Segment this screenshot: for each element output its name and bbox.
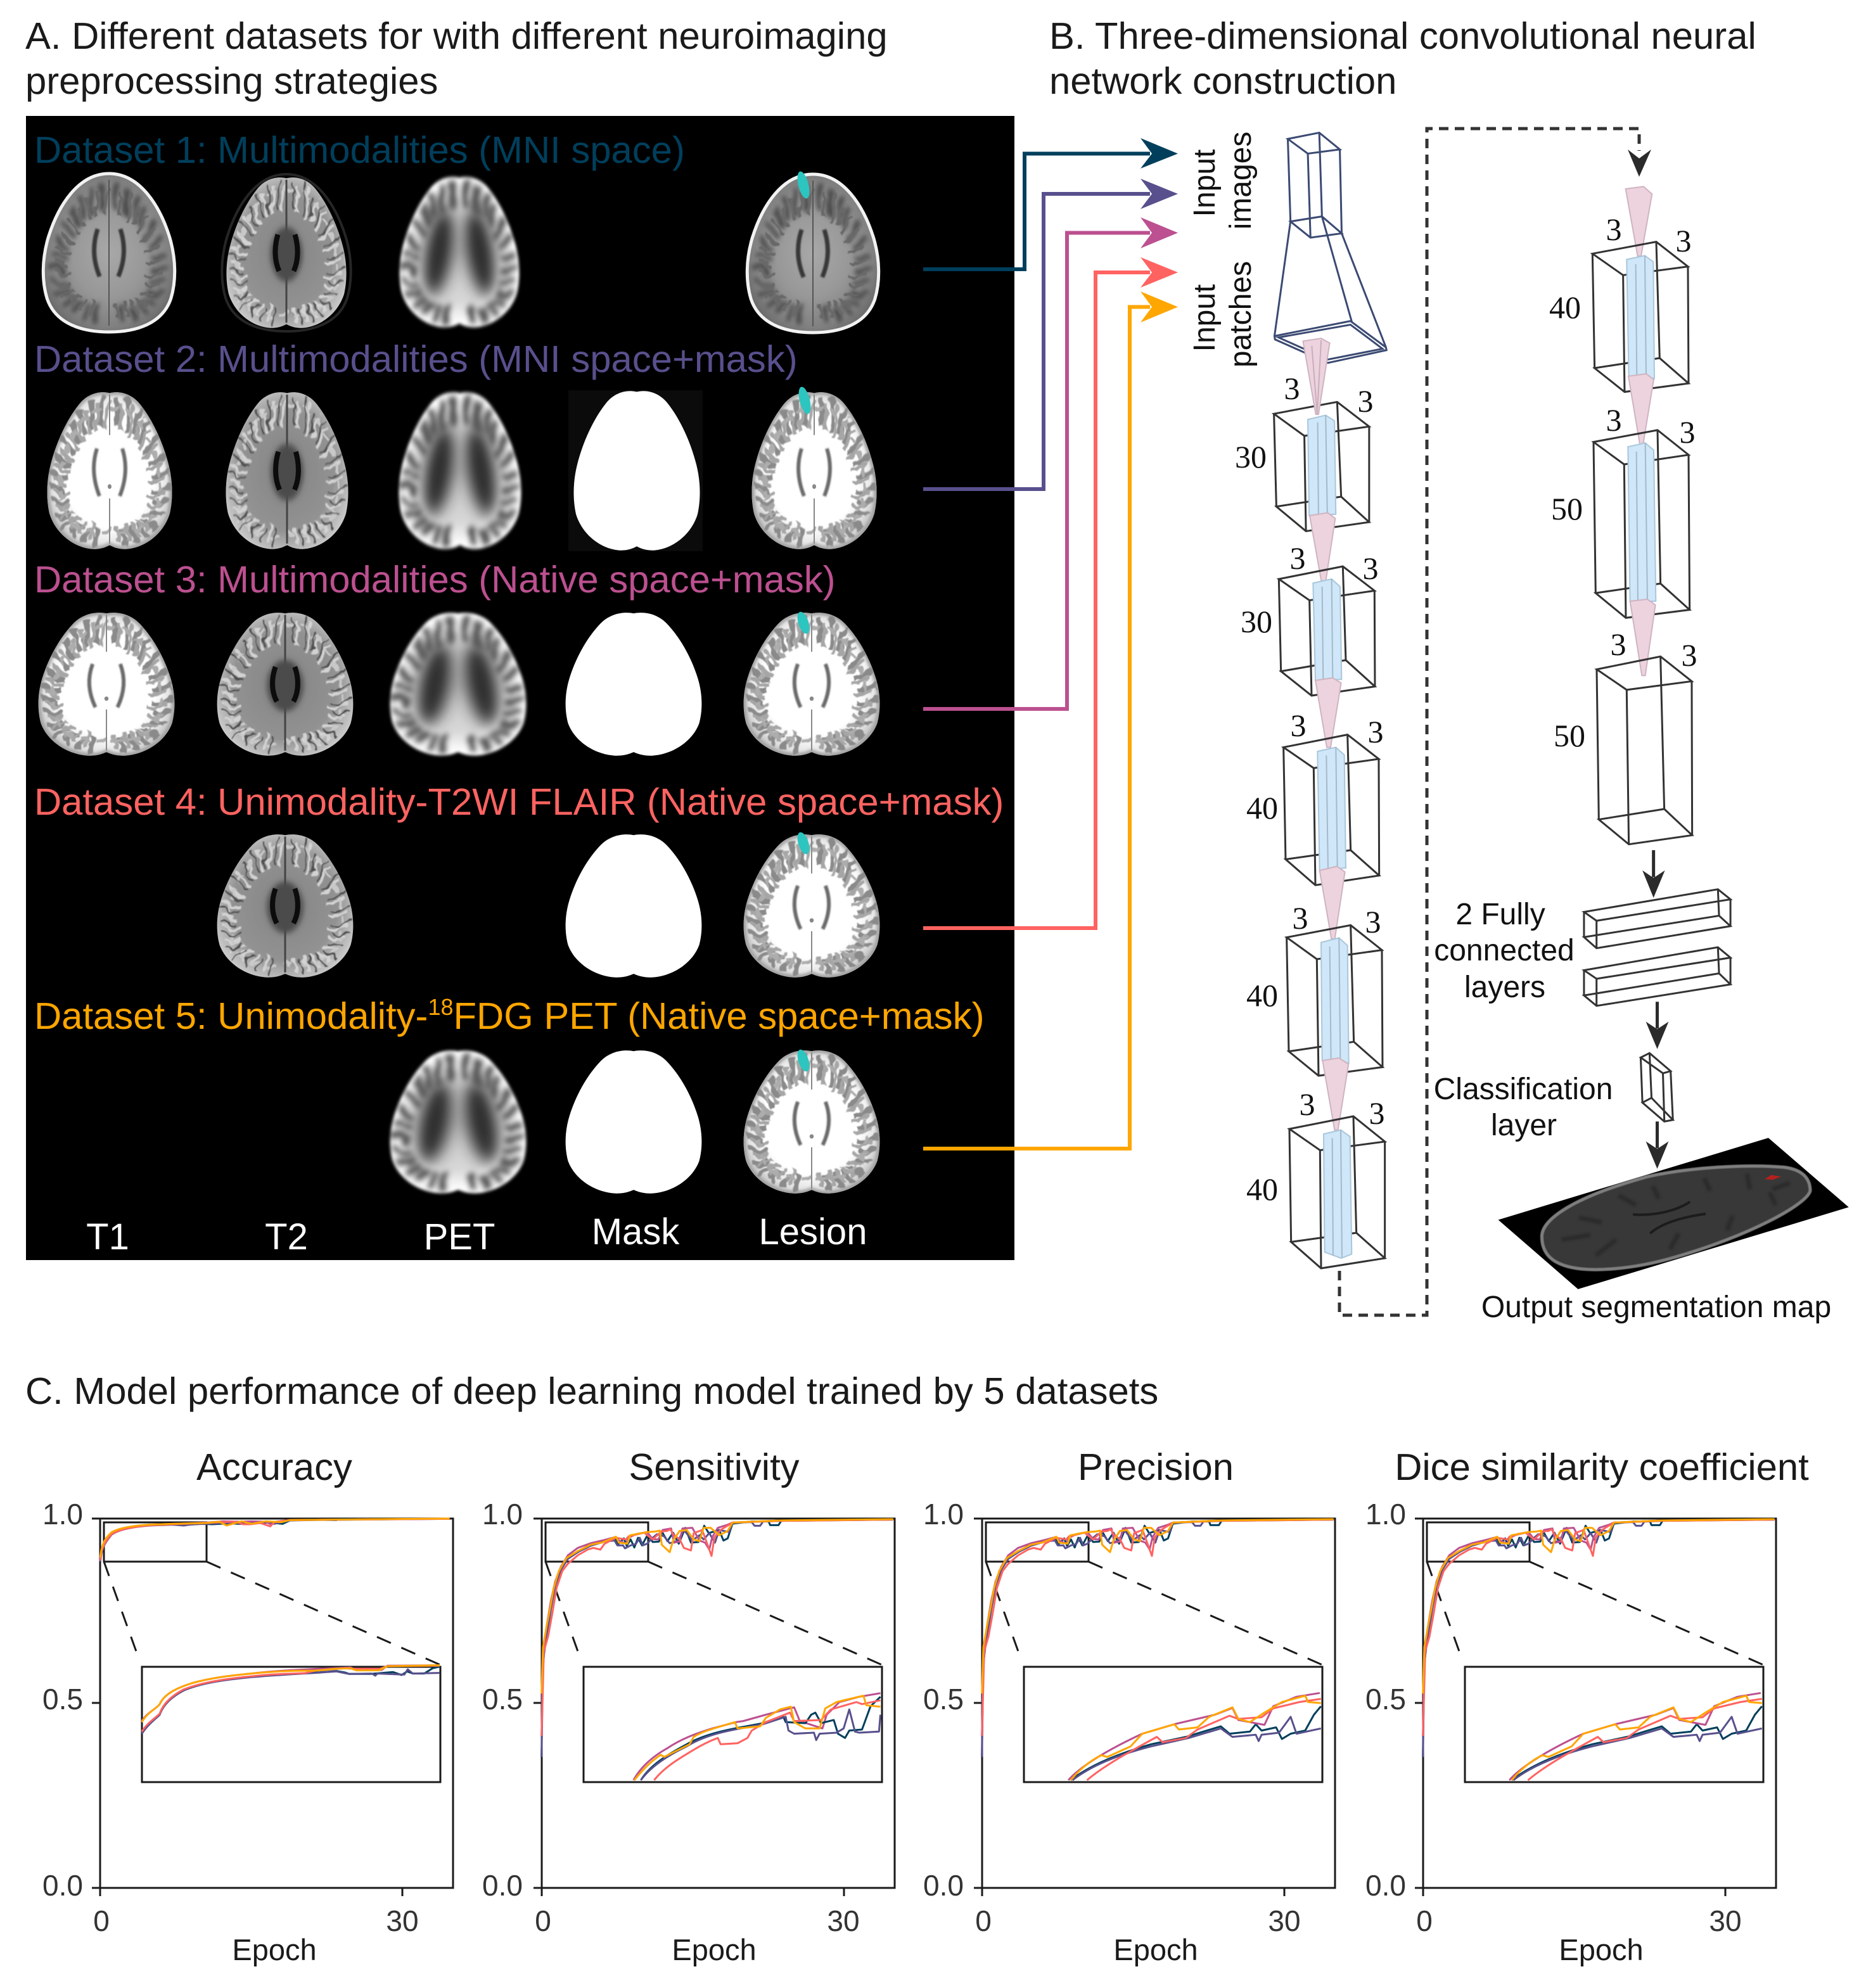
layer size labels: 3: [1369, 1095, 1385, 1131]
label: fully connected layers: connected: [1434, 934, 1575, 967]
label: classification layer: layer: [1491, 1109, 1557, 1142]
label: Input images: [1188, 132, 1258, 229]
x axis title: Epoch: [1559, 1933, 1644, 1966]
chart axes, zoom box and inset frame: [974, 1519, 1335, 1896]
row 5 brain: PET: [390, 1050, 526, 1194]
chart: accuracy: [42, 1446, 453, 1966]
x axis tick labels: [535, 1904, 860, 1937]
y axis tick labels: 0.0: [1365, 1869, 1406, 1902]
chart axes, zoom box and inset frame: [534, 1519, 895, 1896]
column label T1: T1: [86, 1216, 129, 1258]
layer size labels: 3: [1362, 551, 1379, 586]
y axis tick labels: 0.0: [923, 1869, 964, 1902]
layer size labels: 3: [1365, 904, 1381, 940]
layer size labels: 3: [1675, 223, 1692, 258]
x axis tick labels: [1416, 1904, 1742, 1937]
cone layer 2 to 3: [1315, 678, 1341, 748]
y axis tick labels: 0.5: [1365, 1683, 1406, 1716]
label: fully connected layers: layers: [1464, 971, 1545, 1004]
input image box and funnel: [1274, 132, 1386, 363]
arrow head: into right column: [1628, 150, 1651, 177]
network: input funnel and first conv layer: [1274, 132, 1386, 582]
label: classification layer: Classification: [1434, 1073, 1613, 1106]
chart axes, zoom box and inset frame: [1415, 1519, 1776, 1896]
row 3 brain: PET: [390, 613, 526, 756]
row 1 brain: PET: [399, 177, 520, 328]
layer 4 cube: [1287, 925, 1383, 1076]
heading: panel B: network construction: [1049, 60, 1396, 102]
x axis tick labels: [975, 1904, 1301, 1937]
column label Mask: Mask: [592, 1211, 680, 1252]
arrow: dataset 4 to input: [923, 257, 1178, 928]
layer 6 column: [1626, 255, 1654, 379]
x axis tick labels: 30: [1709, 1904, 1742, 1937]
label: Input patches: Input: [1188, 284, 1222, 352]
y axis tick labels: 1.0: [42, 1498, 83, 1531]
row 2 brain mask: [568, 390, 703, 551]
y axis tick labels: 0.5: [923, 1683, 964, 1716]
network: right column layers: [1592, 186, 1692, 844]
layer 6 cube: [1592, 242, 1689, 392]
cone layer 7 to 8: [1630, 599, 1656, 675]
row 2 brain: T2: [225, 392, 349, 549]
lesion marker row 5: [795, 1048, 812, 1073]
arrow: dataset 2 to input: [923, 179, 1178, 489]
dataset 3 label: Dataset 3: Multimodalities (Native space+mask): [34, 558, 836, 601]
dataset 5 label: FDG PET (Native space+mask): [454, 995, 984, 1037]
x axis tick labels: [93, 1904, 419, 1937]
layer 2 column: [1313, 579, 1341, 680]
cone into layer 6: [1626, 186, 1652, 256]
arrow: dataset 5 to input: [923, 291, 1178, 1149]
row 3 brain: T1: [39, 613, 174, 756]
arrow: dataset 1 to input: [923, 138, 1178, 269]
layer size labels: 3: [1293, 900, 1308, 936]
x axis title: Epoch: [1113, 1933, 1198, 1966]
y axis tick labels: 0.5: [42, 1683, 83, 1716]
arrow: dataset 3 to input: [923, 217, 1178, 709]
layer size labels: 3: [1679, 414, 1696, 450]
column label Lesion: Lesion: [759, 1211, 867, 1252]
network: output section: [1499, 850, 1849, 1289]
label: output segmentation map: Output segmentation map: [1481, 1290, 1831, 1324]
curves: inset: [1509, 1693, 1762, 1780]
row 4 brain: lesion overlay: [744, 834, 879, 978]
row 2 brain: PET: [399, 392, 521, 549]
label: Input patches: [1188, 261, 1258, 367]
dataset 1 label: Dataset 1: Multimodalities (MNI space): [34, 129, 685, 171]
chart: dice similarity coefficient: [1365, 1446, 1809, 1966]
label: Input images: Input: [1188, 150, 1222, 217]
row 3 brain mask: [566, 613, 701, 756]
chart title: Sensitivity: [629, 1446, 800, 1488]
chart: precision: [923, 1446, 1335, 1966]
dashed connector between network columns: [1339, 129, 1639, 1315]
y axis tick labels: 1.0: [482, 1498, 523, 1531]
panel A: datasets: [26, 116, 1014, 1260]
curves: main: [982, 1519, 1334, 1757]
chart title: Accuracy: [196, 1446, 352, 1488]
row 2 brain: T1: [47, 392, 172, 549]
row 1 brain: T1: [43, 174, 175, 332]
y axis tick labels: 1.0: [1365, 1498, 1406, 1531]
layer size labels: 3: [1682, 637, 1697, 673]
row 4 brain mask: [566, 834, 701, 978]
curves: inset: [1068, 1693, 1321, 1780]
layer 1 cube: [1274, 402, 1369, 531]
layer 4 column: [1321, 938, 1349, 1063]
layer size labels: 30: [1241, 604, 1272, 639]
layer 7 cube: [1594, 430, 1690, 618]
cone layer 4 to 5: [1322, 1058, 1348, 1130]
cone layer 3 to 4: [1320, 867, 1345, 939]
kernel cone into layer 1: [1303, 338, 1330, 414]
layer 7 column: [1628, 443, 1656, 601]
arrow to output map: [1646, 1121, 1668, 1169]
chart: sensitivity: [482, 1446, 895, 1966]
heading: panel A: preprocessing strategies: [25, 60, 438, 102]
dataset 5 label: 18: [428, 994, 454, 1020]
row 5 brain: lesion overlay: [744, 1050, 879, 1194]
label: fully connected layers: [1434, 898, 1575, 1004]
layer size labels: 3: [1606, 212, 1622, 247]
y axis tick labels: [1365, 1498, 1406, 1902]
chart axes, zoom box and inset frame: [92, 1519, 453, 1896]
column label T2: T2: [265, 1216, 308, 1258]
x axis tick labels: 0: [975, 1904, 992, 1937]
y axis tick labels: 0.0: [482, 1869, 523, 1902]
x axis tick labels: 0: [93, 1904, 110, 1937]
layer size labels: 3: [1290, 540, 1305, 576]
fully connected layer 2: [1584, 947, 1730, 1006]
lesion marker row 4: [795, 831, 812, 856]
layer size labels: 40: [1549, 290, 1581, 325]
row 4 brain: T2: [216, 834, 354, 978]
row 3 brain: T2: [216, 613, 354, 756]
curves: main and inset: [100, 1519, 450, 1734]
dataset 5 label: Dataset 5: Unimodality-: [34, 995, 428, 1037]
label: fully connected layers: 2 Fully: [1455, 898, 1545, 931]
row 3 brain: lesion overlay: [744, 613, 879, 756]
dataset 4 label: Dataset 4: Unimodality-T2WI FLAIR (Native space+mask): [34, 781, 1004, 823]
y axis tick labels: [923, 1498, 964, 1902]
layer 1 feature column: [1308, 415, 1336, 516]
label: classification layer: [1434, 1073, 1613, 1142]
heading: panel C: C. Model performance of deep learning model trained by 5 datasets: [25, 1370, 1158, 1412]
layer size labels: 3: [1290, 708, 1307, 743]
label: Input patches: patches: [1224, 261, 1258, 367]
y axis tick labels: 0.5: [482, 1683, 523, 1716]
arrow to fully connected layers: [1642, 850, 1665, 898]
layer 3 column: [1317, 748, 1346, 870]
lesion marker row 3: [795, 610, 812, 635]
curves: main: [1423, 1519, 1775, 1757]
layer 2 cube: [1279, 566, 1375, 696]
dataset 2 label: Dataset 2: Multimodalities (MNI space+mask): [34, 338, 798, 380]
classification layer box: [1640, 1053, 1673, 1121]
x axis title: Epoch: [232, 1933, 317, 1966]
chart title: Dice similarity coefficient: [1395, 1446, 1809, 1488]
layer size labels: 3: [1611, 627, 1626, 662]
y axis tick labels: 0.0: [42, 1869, 83, 1902]
x axis tick labels: 30: [827, 1904, 860, 1937]
layer size labels: 3: [1299, 1086, 1315, 1122]
layer size labels: 40: [1246, 1171, 1278, 1207]
lesion marker row 1: [795, 170, 812, 200]
layer size labels: 3: [1357, 383, 1374, 419]
layer size labels: 50: [1554, 718, 1585, 753]
network: left column layers: [1279, 566, 1385, 1268]
column label PET: PET: [424, 1216, 495, 1258]
row 5 brain mask: [566, 1050, 701, 1194]
x axis title: Epoch: [672, 1933, 757, 1966]
y axis tick labels: [42, 1498, 83, 1902]
black panel background: [26, 116, 1014, 1260]
layer size labels: 3: [1606, 402, 1622, 438]
layer size labels: 3: [1284, 371, 1300, 406]
layer size labels: 50: [1551, 491, 1583, 526]
output segmentation map: [1499, 1138, 1849, 1289]
layer 3 cube: [1284, 735, 1379, 885]
fully connected layer 1: [1584, 889, 1730, 948]
row 1 brain: T2: [222, 174, 351, 331]
lesion marker row 2: [796, 386, 813, 415]
chart title: Precision: [1078, 1446, 1234, 1488]
heading: panel A: A. Different datasets for with different neuroimaging: [25, 15, 888, 57]
arrow to classification layer: [1646, 1002, 1668, 1049]
heading: panel B: B. Three-dimensional convolutional neural: [1049, 15, 1756, 57]
x axis tick labels: 30: [1268, 1904, 1301, 1937]
row 1 brain: lesion overlay: [747, 174, 879, 333]
curves: main and inset: [542, 1519, 893, 1780]
layer 5 column: [1324, 1130, 1352, 1258]
y axis tick labels: [482, 1498, 523, 1902]
x axis tick labels: 0: [1416, 1904, 1433, 1937]
cone layer 6 to 7: [1628, 374, 1654, 444]
layer 8 cube: [1597, 656, 1692, 844]
layer size labels: 3: [1367, 714, 1384, 749]
x axis tick labels: 30: [386, 1904, 419, 1937]
row 2 brain: lesion overlay: [751, 392, 877, 549]
layer size labels: 40: [1246, 978, 1278, 1013]
y axis tick labels: 1.0: [923, 1498, 964, 1531]
layer 5 cube: [1289, 1116, 1385, 1268]
label: Input images: images: [1224, 132, 1258, 229]
kernel cone from layer 1: [1310, 513, 1335, 582]
x axis tick labels: 0: [535, 1904, 551, 1937]
layer size labels: 40: [1246, 790, 1278, 825]
layer size labels: [1235, 212, 1697, 1207]
layer size labels: 30: [1235, 439, 1267, 475]
